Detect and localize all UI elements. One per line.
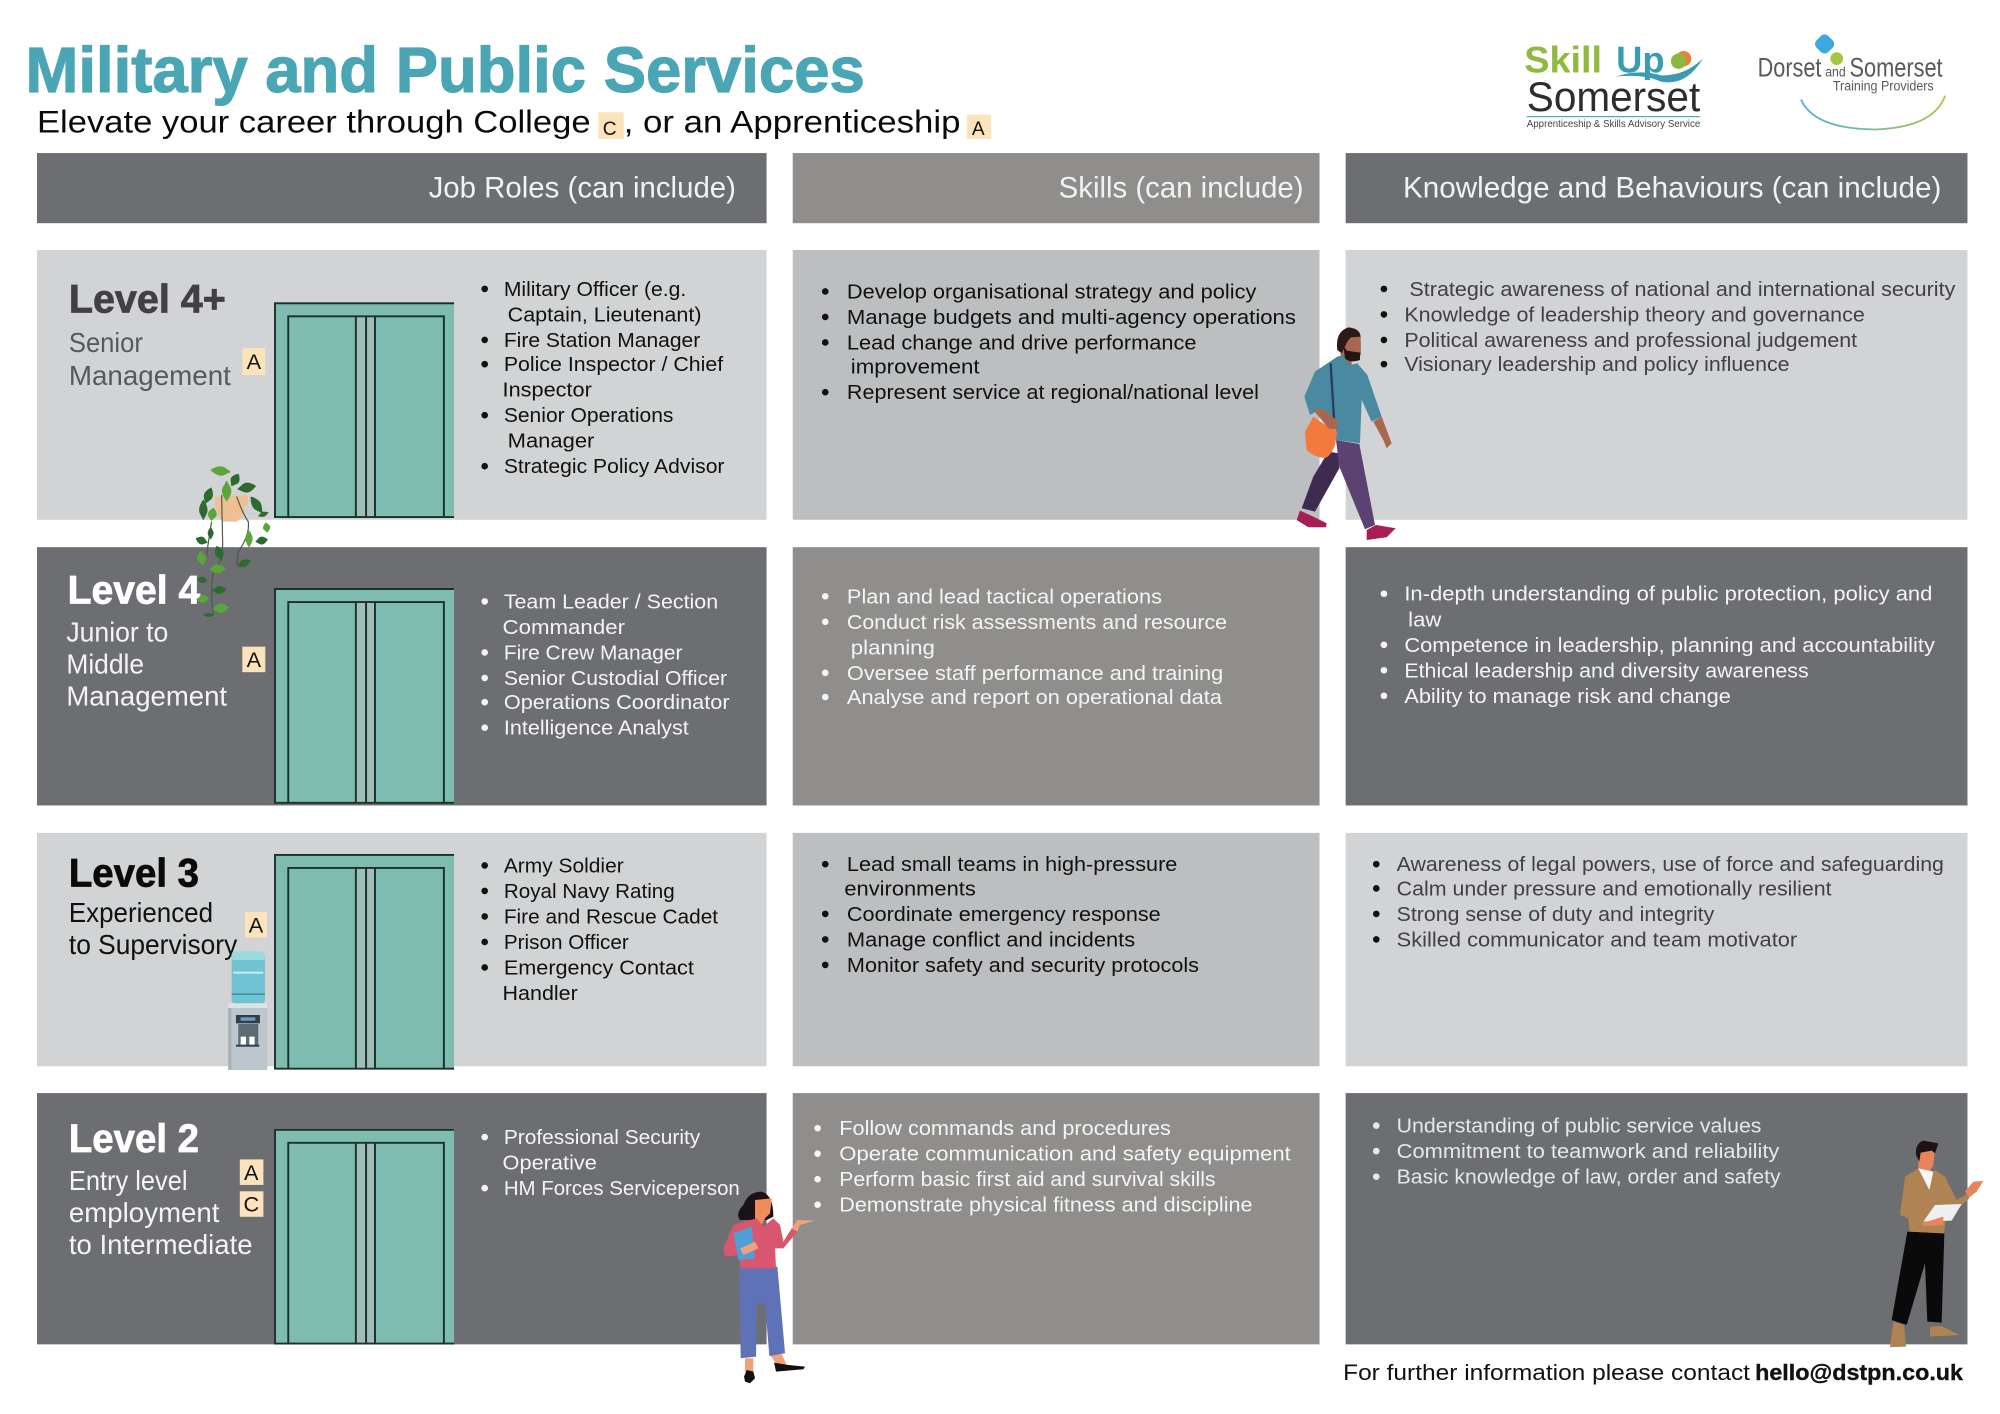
job roles list: Royal Navy Rating <box>504 880 675 903</box>
level heading: Level 4+: Level 4+ <box>69 277 226 321</box>
badge: College: C <box>243 1192 259 1217</box>
panel: Level 2 knowledge and behaviours: Basic knowledge of law, order and safety <box>1397 1166 1781 1189</box>
panel: Level 4 knowledge and behaviours <box>1346 547 1967 805</box>
panel: Level 2 skills <box>793 1093 1320 1344</box>
level description: Junior to Middle Management: Management <box>66 680 227 711</box>
job roles list: Intelligence Analyst <box>504 717 689 740</box>
panel: Level 4+ skills: Manage budgets and multi-agency operations <box>847 306 1296 329</box>
job roles list: Senior Custodial Officer <box>504 667 727 690</box>
panel: Level 3 knowledge and behaviours: Calm under pressure and emotionally resilient <box>1397 877 1832 900</box>
job roles list: Operations Coordinator <box>504 691 730 714</box>
level heading: Level 4: Level 4 <box>68 568 200 612</box>
job roles list: Fire and Rescue Cadet <box>504 905 718 928</box>
panel: Level 3 job roles <box>37 833 767 1069</box>
panel: Level 3 skills: environments <box>844 877 976 900</box>
panel: Level 4 knowledge and behaviours: law <box>1408 608 1441 631</box>
panel: Level 3 skills: Lead small teams in high-pressure <box>847 853 1177 876</box>
job roles list: Manager <box>508 430 595 453</box>
header: Job Roles: Job Roles (can include) <box>429 172 736 205</box>
footer contact line: hello@dstpn.co.uk <box>1755 1360 1964 1385</box>
panel: Level 4 skills: Conduct risk assessments and resource <box>847 611 1227 634</box>
level heading: Level 3: Level 3 <box>69 851 199 895</box>
panel: Level 4+ skills: Lead change and drive performance <box>847 331 1196 354</box>
badge: College <box>240 1191 263 1217</box>
panel: Level 4 skills: planning <box>851 636 935 659</box>
job roles list <box>481 1126 740 1200</box>
logo: Dorset and Somerset Training Providers: Somerset <box>1849 53 1943 83</box>
badge: Apprenticeship: A <box>247 349 262 374</box>
job roles list: Senior Operations <box>504 404 673 427</box>
level heading: Level 2: Level 2 <box>69 1117 199 1161</box>
footer contact line: For further information please contact <box>1343 1360 1751 1385</box>
panel: Level 4+ skills: Represent service at regional/national level <box>847 381 1259 404</box>
level description: Senior Management: Management <box>69 360 231 391</box>
icon: water cooler <box>228 952 267 1070</box>
panel: Level 4 knowledge and behaviours: Competence in leadership, planning and accountability <box>1404 634 1936 657</box>
panel: Level 2 knowledge and behaviours <box>1346 1093 1967 1344</box>
logo: Skill Up Somerset <box>1524 40 1703 130</box>
panel: Level 4 knowledge and behaviours: Ability to manage risk and change <box>1404 685 1731 708</box>
panel: Level 4 knowledge and behaviours: In-depth understanding of public protection, policy and <box>1404 583 1932 606</box>
panel: Level 3 skills: Coordinate emergency response <box>847 903 1161 926</box>
panel: Level 2 skills: Follow commands and procedures <box>839 1117 1171 1140</box>
panel: Level 3 skills <box>793 833 1320 1066</box>
panel: Level 3 knowledge and behaviours: Awareness of legal powers, use of force and safeguarding <box>1397 853 1944 876</box>
logo: Dorset and Somerset Training Providers <box>1758 32 1945 129</box>
level description: Entry level employment to Intermediate: Entry level <box>69 1165 187 1196</box>
job roles list: Professional Security <box>504 1126 701 1149</box>
panel: Level 4+ skills <box>793 250 1320 520</box>
job roles list: Captain, Lieutenant) <box>508 303 702 326</box>
job roles list: Army Soldier <box>504 854 624 877</box>
badge: Apprenticeship: A <box>249 912 264 937</box>
icon: lift doors <box>274 854 454 1069</box>
header: Job Roles <box>37 153 767 223</box>
header: Skills: Skills (can include) <box>1059 172 1304 205</box>
icon: lift doors <box>274 588 454 804</box>
panel: Level 3 knowledge and behaviours <box>1346 833 1967 1066</box>
panel: Level 4+ knowledge and behaviours: Knowledge of leadership theory and governance <box>1404 303 1865 326</box>
job roles list: Handler <box>503 982 578 1005</box>
panel: Level 2 skills: Perform basic first aid and survival skills <box>839 1168 1216 1191</box>
job roles list: Operative <box>503 1152 597 1175</box>
logo: Skill Up Somerset: Up <box>1616 40 1665 81</box>
panel: Level 4+ skills: Develop organisational strategy and policy <box>847 280 1257 303</box>
panel: Level 4 knowledge and behaviours: Ethical leadership and diversity awareness <box>1404 659 1809 682</box>
logo: Dorset and Somerset Training Providers: Training Providers <box>1833 78 1934 94</box>
logo: Dorset and Somerset Training Providers: Dorset <box>1758 53 1822 83</box>
level description: Junior to Middle Management <box>66 617 227 711</box>
level description: Junior to Middle Management: Middle <box>66 648 144 679</box>
panel: Level 4 skills: Oversee staff performance and training <box>847 662 1223 685</box>
badge: Apprenticeship: A <box>244 1160 259 1185</box>
job roles list <box>481 854 718 1005</box>
job roles list: Commander <box>503 616 625 639</box>
panel: Level 4+ knowledge and behaviours <box>1346 250 1967 520</box>
header: Knowledge and Behaviours: Knowledge and Behaviours (can include) <box>1403 172 1941 205</box>
panel: Level 4 skills <box>793 547 1320 805</box>
subtitle: , or an Apprenticeship <box>624 104 960 140</box>
panel: Level 4 job roles <box>37 547 767 805</box>
level description: Entry level employment to Intermediate: employment <box>69 1197 220 1228</box>
level description: Senior Management: Senior <box>69 327 143 358</box>
level description: Senior Management <box>69 327 231 391</box>
subtitle: Elevate your career through College <box>37 104 591 140</box>
level description: Experienced to Supervisory: to Supervisory <box>69 929 238 960</box>
job roles list: Military Officer (e.g. <box>504 278 686 301</box>
panel: Level 2 skills: Demonstrate physical fitness and discipline <box>839 1194 1253 1217</box>
badge: Apprenticeship <box>240 1159 263 1185</box>
panel: Level 2 knowledge and behaviours: Understanding of public service values <box>1397 1115 1761 1138</box>
level description: Entry level employment to Intermediate <box>69 1165 253 1260</box>
icon: lift doors <box>274 302 454 518</box>
panel: Level 4+ knowledge and behaviours: Strategic awareness of national and international security <box>1409 278 1956 301</box>
job roles list: HM Forces Serviceperson <box>504 1177 740 1200</box>
job roles list <box>481 278 725 478</box>
level description: Junior to Middle Management: Junior to <box>66 617 168 648</box>
icon: hanging plant <box>194 465 271 617</box>
job roles list: Fire Station Manager <box>504 329 700 352</box>
job roles list: Strategic Policy Advisor <box>504 455 725 478</box>
panel: Level 4+ skills: improvement <box>851 356 980 379</box>
logo: Skill Up Somerset: Somerset <box>1527 73 1701 120</box>
header: Skills <box>793 153 1320 223</box>
panel: Level 2 skills: Operate communication and safety equipment <box>839 1143 1291 1166</box>
badge: Apprenticeship <box>242 647 265 672</box>
panel: Level 3 knowledge and behaviours: Strong sense of duty and integrity <box>1397 903 1715 926</box>
figure: man holding paper <box>1890 1141 1983 1347</box>
subtitle: A <box>972 119 985 140</box>
badge: Apprenticeship <box>242 348 265 375</box>
panel: Level 4+ job roles <box>37 250 767 520</box>
level description: Experienced to Supervisory: Experienced <box>69 897 213 928</box>
panel: Level 3 skills: Monitor safety and security protocols <box>847 954 1199 977</box>
panel: Level 2 knowledge and behaviours: Commitment to teamwork and reliability <box>1397 1140 1780 1163</box>
logo: Skill Up Somerset: Apprenticeship & Skills Advisory Service <box>1527 119 1700 130</box>
subtitle: C <box>603 119 617 140</box>
panel: Level 2 job roles <box>37 1093 767 1344</box>
panel: Level 4 skills: Plan and lead tactical operations <box>847 585 1162 608</box>
subtitle <box>37 104 991 140</box>
figure: woman with clipboard <box>723 1192 815 1383</box>
job roles list: Emergency Contact <box>504 956 694 979</box>
level description: Entry level employment to Intermediate: to Intermediate <box>69 1229 253 1260</box>
job roles list: Team Leader / Section <box>504 590 718 613</box>
header: Knowledge and Behaviours <box>1346 153 1967 223</box>
job roles list: Police Inspector / Chief <box>504 353 723 376</box>
panel: Level 4 skills: Analyse and report on operational data <box>847 686 1222 709</box>
level description: Experienced to Supervisory <box>69 897 238 960</box>
badge: Apprenticeship: A <box>247 647 262 672</box>
panel: Level 4+ knowledge and behaviours: Political awareness and professional judgement <box>1404 329 1857 352</box>
figure: man walking with orange bag <box>1297 327 1396 540</box>
panel: Level 4+ knowledge and behaviours: Visionary leadership and policy influence <box>1404 353 1790 376</box>
job roles list <box>481 590 730 740</box>
job roles list: Inspector <box>503 379 592 402</box>
panel: Level 3 knowledge and behaviours: Skilled communicator and team motivator <box>1397 928 1797 951</box>
title: Military and Public Services <box>26 34 865 106</box>
badge: Apprenticeship <box>245 912 267 937</box>
footer contact line <box>1343 1360 1964 1385</box>
job roles list: Prison Officer <box>504 931 629 954</box>
job roles list: Fire Crew Manager <box>504 641 683 664</box>
panel: Level 3 skills: Manage conflict and incidents <box>847 928 1135 951</box>
icon: lift doors <box>274 1129 454 1344</box>
logo: Dorset and Somerset Training Providers: and <box>1825 64 1846 80</box>
logo: Skill Up Somerset: Skill <box>1524 40 1602 81</box>
